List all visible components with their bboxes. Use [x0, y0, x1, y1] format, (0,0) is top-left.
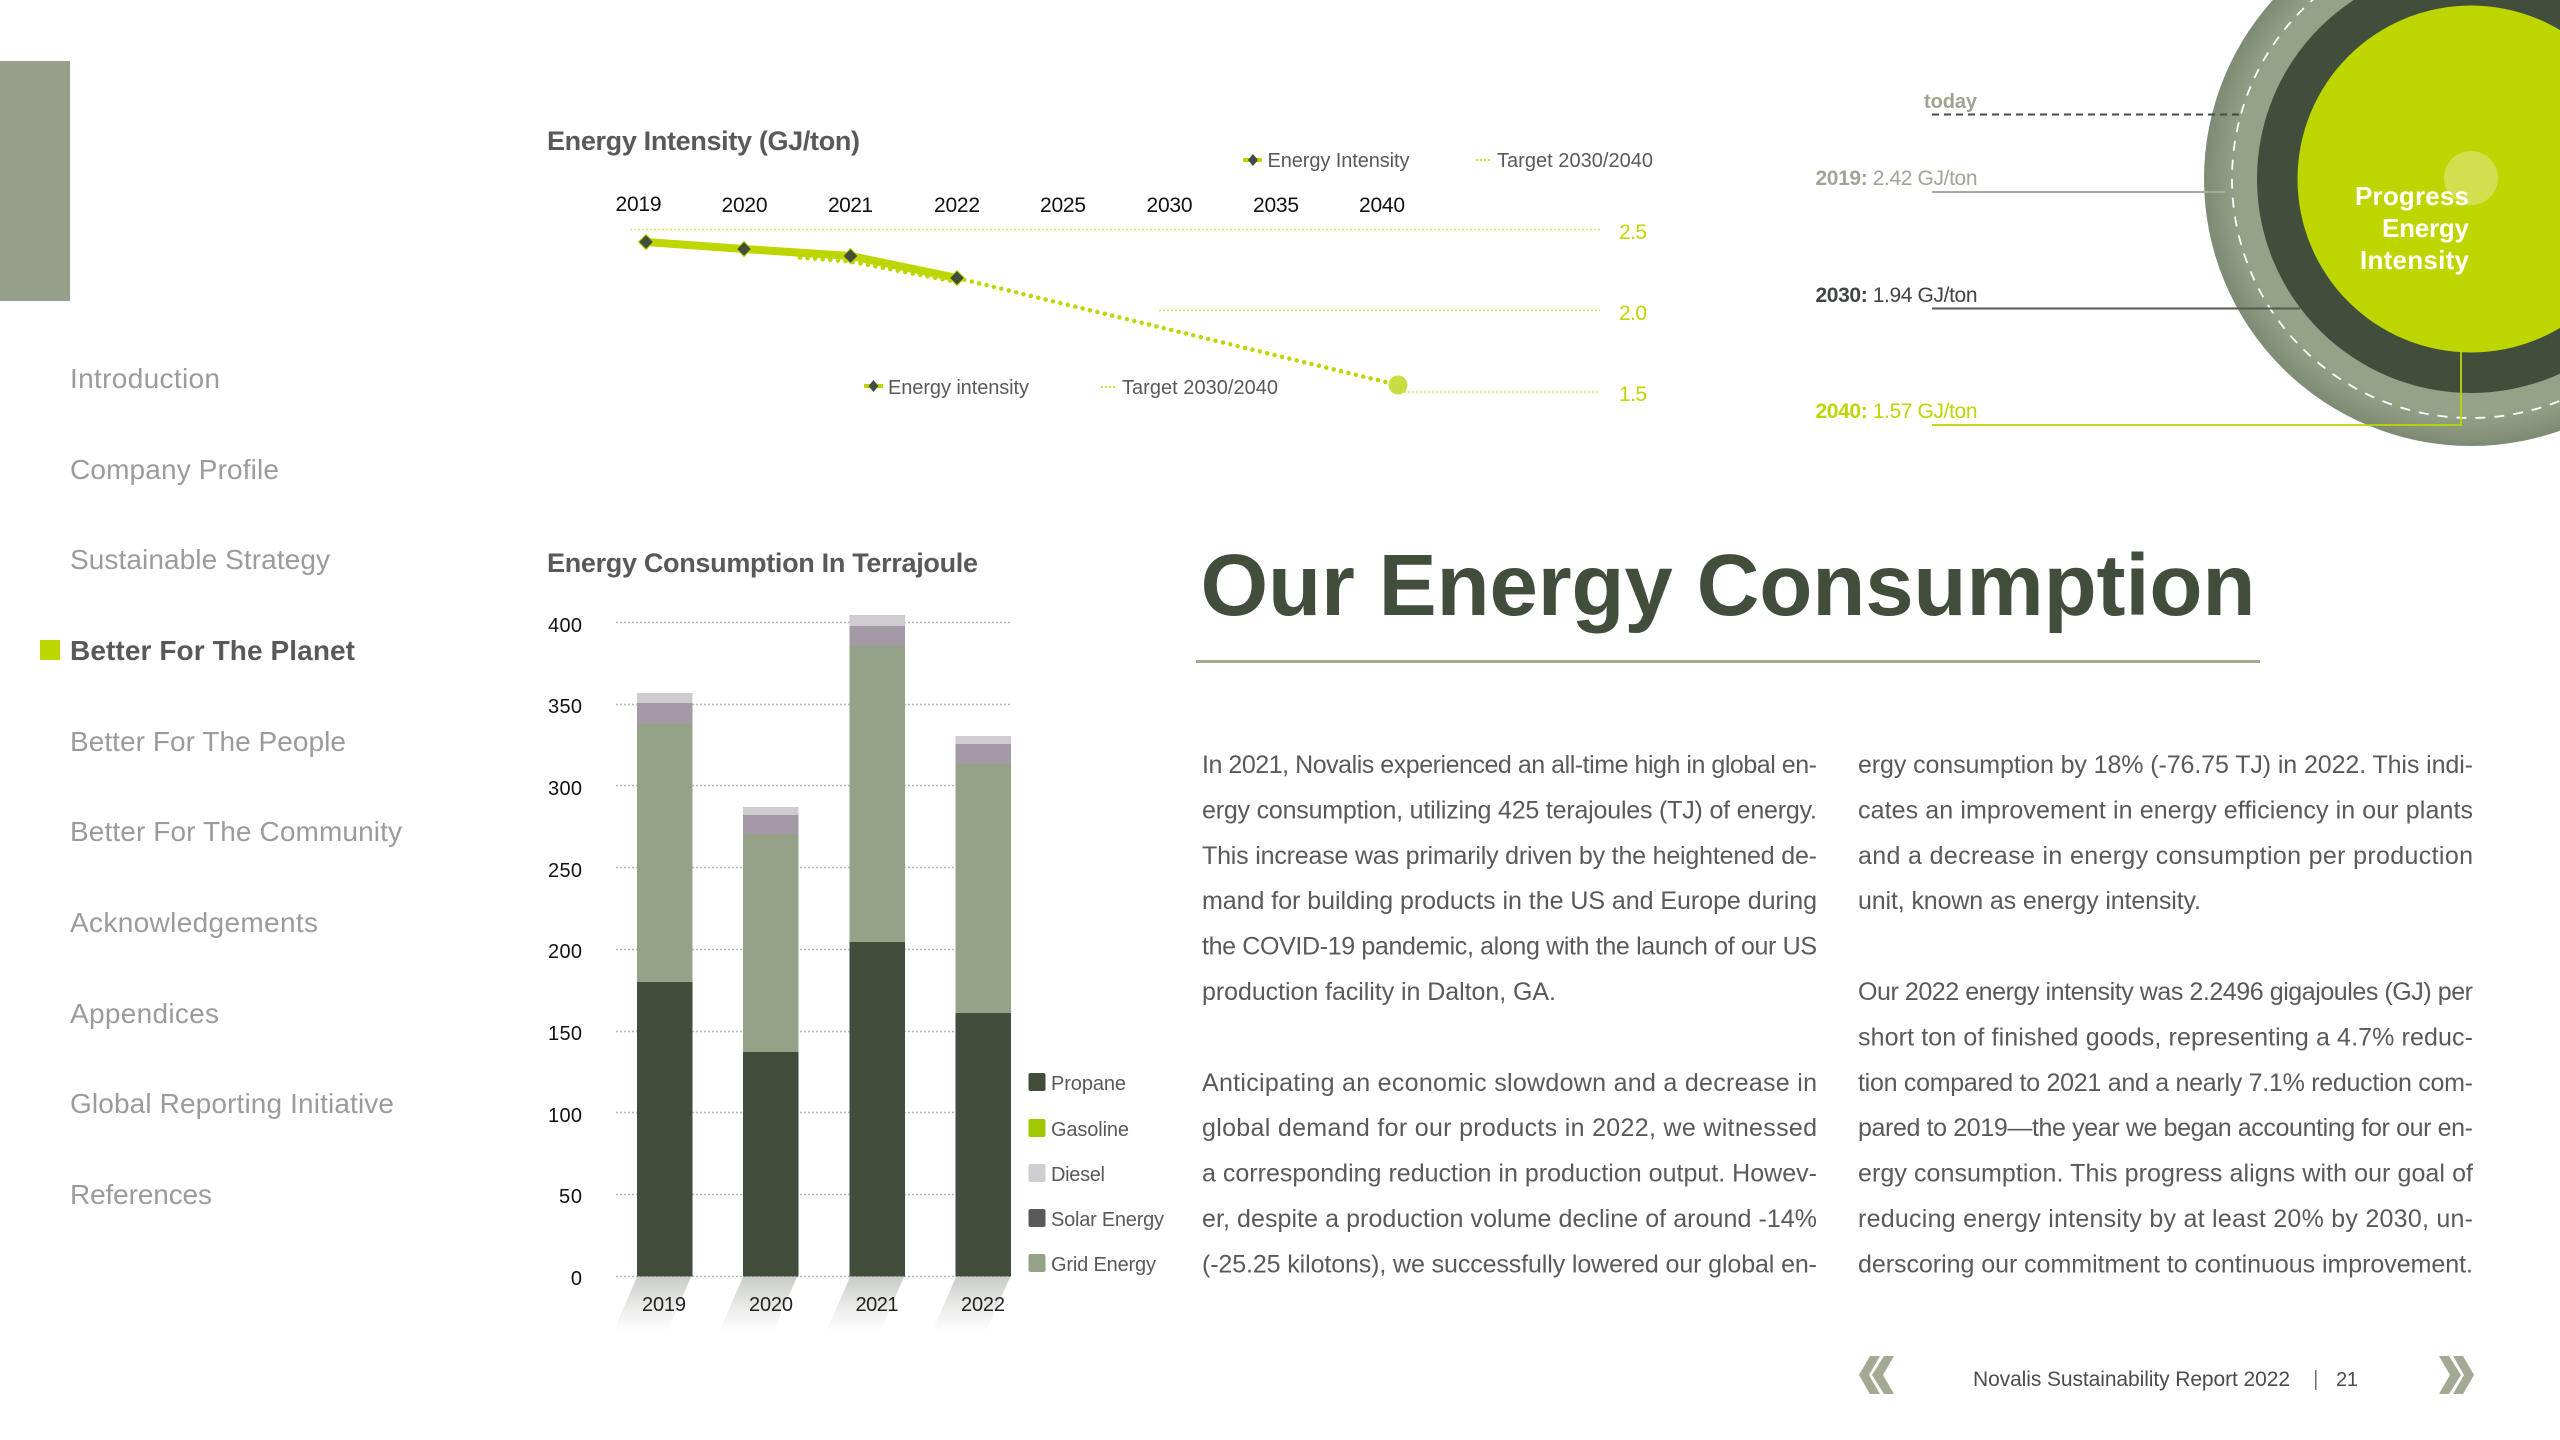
year labels: 2022 — [961, 1294, 1005, 1316]
body text column 2: cates an improvement in energy efficiency in our plants — [1858, 796, 2473, 824]
year labels — [642, 1294, 1005, 1316]
year labels: 2020 — [749, 1294, 793, 1316]
body text column 2: ergy consumption. This progress aligns with our goal of — [1858, 1160, 2473, 1188]
value axis: 350 — [548, 696, 582, 718]
body text column 2: tion compared to 2021 and a nearly 7.1% reduction com- — [1858, 1069, 2473, 1097]
body text column 2 — [1858, 751, 2473, 1278]
outer ring — [2204, 0, 2560, 446]
dark ring — [2257, 0, 2560, 393]
value axis: 300 — [548, 778, 582, 800]
footer text: Novalis Sustainability Report 2022 — [1973, 1368, 2290, 1391]
legend: Solar Energy — [1051, 1209, 1164, 1231]
legend: Diesel — [1051, 1164, 1105, 1186]
line chart: energy intensity — [547, 126, 1653, 406]
sidebar navigation: Better For The Community — [70, 816, 402, 847]
sidebar navigation — [40, 363, 402, 1210]
bar 2021 — [850, 615, 905, 1276]
value axis: 150 — [548, 1023, 582, 1045]
gridlines — [630, 230, 1600, 392]
legend: Propane — [1051, 1073, 1126, 1095]
lower legend: Energy intensity — [888, 377, 1029, 399]
sidebar navigation: Introduction — [70, 363, 220, 394]
legend — [1028, 1073, 1164, 1276]
target dotted line — [800, 258, 1398, 385]
body text column 1: Anticipating an economic slowdown and a decrease in — [1202, 1069, 1817, 1097]
legend: Gasoline — [1051, 1119, 1129, 1141]
bar 2019 — [637, 693, 692, 1276]
heading rule — [1196, 660, 2260, 663]
body text column 1: er, despite a production volume decline of around -14% — [1202, 1205, 1817, 1233]
data point markers — [638, 234, 964, 286]
callout: 2040 value — [1816, 352, 2461, 425]
value axis: 2.5 — [1619, 221, 1647, 244]
value axis: 400 — [548, 615, 582, 637]
body text column 2: pared to 2019—the year we began accounting for our en- — [1858, 1114, 2473, 1142]
icon: next page chevrons — [2439, 1356, 2474, 1394]
circle label: Intensity — [2360, 245, 2470, 275]
callout: 2040 value: 2040: 1.57 GJ/ton — [1816, 400, 1978, 423]
sidebar accent block — [0, 61, 70, 301]
body text column 2: and a decrease in energy consumption per production — [1858, 842, 2473, 870]
gridlines — [616, 622, 1011, 1276]
year axis: 2019 — [616, 193, 662, 216]
value axis: 250 — [548, 860, 582, 882]
body text column 2: reducing energy intensity by at least 20% by 2030, un- — [1858, 1205, 2473, 1233]
circle label: Energy — [2382, 213, 2470, 243]
body text column 2: derscoring our commitment to continuous improvement. — [1858, 1250, 2473, 1278]
circle label — [2355, 181, 2470, 275]
footer text: 21 — [2336, 1369, 2358, 1391]
value axis: 100 — [548, 1105, 582, 1127]
active section marker — [40, 640, 60, 660]
sidebar navigation: References — [70, 1179, 212, 1210]
icon: previous page chevrons — [1859, 1356, 1894, 1394]
callout: 2030 value: 2030: 1.94 GJ/ton — [1816, 284, 1978, 307]
body text column 1: (-25.25 kilotons), we successfully lowered our global en- — [1202, 1250, 1817, 1278]
sidebar navigation: Acknowledgements — [70, 907, 318, 938]
chart title: Energy Consumption In Terrajoule — [547, 548, 978, 578]
value axis: 2.0 — [1619, 302, 1647, 325]
sidebar navigation: Better For The Planet — [70, 635, 355, 666]
sidebar navigation: Global Reporting Initiative — [70, 1088, 394, 1119]
chart title: Energy Intensity (GJ/ton) — [547, 126, 860, 156]
bar 2022 — [956, 736, 1011, 1276]
2040 target point — [1388, 376, 1408, 394]
year axis: 2021 — [828, 194, 873, 217]
year axis: 2020 — [722, 194, 768, 217]
body text column 2: unit, known as energy intensity. — [1858, 887, 2201, 915]
sidebar navigation: Better For The People — [70, 726, 346, 757]
year axis: 2035 — [1253, 194, 1299, 217]
value axis: 1.5 — [1619, 383, 1647, 406]
body text column 1: production facility in Dalton, GA. — [1202, 978, 1556, 1006]
body text column 1: ergy consumption, utilizing 425 terajoules (TJ) of energy. — [1202, 796, 1817, 824]
top legend — [1243, 150, 1653, 172]
top legend: Energy Intensity — [1268, 150, 1410, 172]
sidebar navigation: Sustainable Strategy — [70, 544, 330, 575]
body text column 1: This increase was primarily driven by the heightened de- — [1202, 842, 1817, 870]
sidebar navigation: Appendices — [70, 998, 219, 1029]
year axis: 2030 — [1146, 194, 1192, 217]
lower legend — [864, 377, 1278, 399]
body text column 2: Our 2022 energy intensity was 2.2496 gigajoules (GJ) per — [1858, 978, 2473, 1006]
body text column 1: a corresponding reduction in production output. Howev- — [1202, 1160, 1817, 1188]
callout: 2019 value: 2019: 2.42 GJ/ton — [1816, 167, 1978, 190]
year labels: 2019 — [642, 1294, 686, 1316]
value axis: 0 — [571, 1268, 582, 1290]
year axis: 2025 — [1040, 194, 1086, 217]
year axis — [616, 193, 1405, 217]
sidebar navigation: Company Profile — [70, 454, 279, 485]
lower legend: Target 2030/2040 — [1122, 377, 1278, 399]
bar shadows — [613, 1277, 1010, 1332]
body text column 1 — [1202, 751, 1817, 1278]
legend: Grid Energy — [1051, 1254, 1156, 1276]
value axis — [548, 615, 582, 1290]
year axis: 2022 — [934, 194, 980, 217]
circle label: Progress — [2355, 181, 2469, 211]
body text column 2: ergy consumption by 18% (-76.75 TJ) in 2022. This indi- — [1858, 751, 2473, 779]
stacked bar chart: energy consumption — [547, 548, 1164, 1332]
year axis: 2040 — [1359, 194, 1405, 217]
body text column 1: mand for building products in the US and Europe during — [1202, 887, 1817, 915]
main heading: Our Energy Consumption — [1200, 537, 2256, 634]
value axis: 50 — [559, 1186, 582, 1208]
value axis — [1619, 221, 1647, 406]
callout: today: today — [1924, 91, 1978, 113]
year labels: 2021 — [856, 1294, 898, 1316]
dashed orbit — [2232, 0, 2560, 418]
top legend: Target 2030/2040 — [1497, 150, 1653, 172]
progress circle diagram — [2204, 0, 2560, 446]
bar 2020 — [743, 807, 798, 1276]
body text column 1: the COVID-19 pandemic, along with the launch of our US — [1202, 933, 1817, 961]
body text column 1: In 2021, Novalis experienced an all-time high in global en- — [1202, 751, 1817, 779]
actual intensity line — [646, 242, 957, 278]
body text column 2: short ton of finished goods, representing a 4.7% reduc- — [1858, 1023, 2473, 1051]
body text column 1: global demand for our products in 2022, we witnessed — [1202, 1114, 1817, 1142]
highlight dot — [2444, 151, 2498, 205]
inner circle — [2298, 6, 2560, 352]
value axis: 200 — [548, 941, 582, 963]
